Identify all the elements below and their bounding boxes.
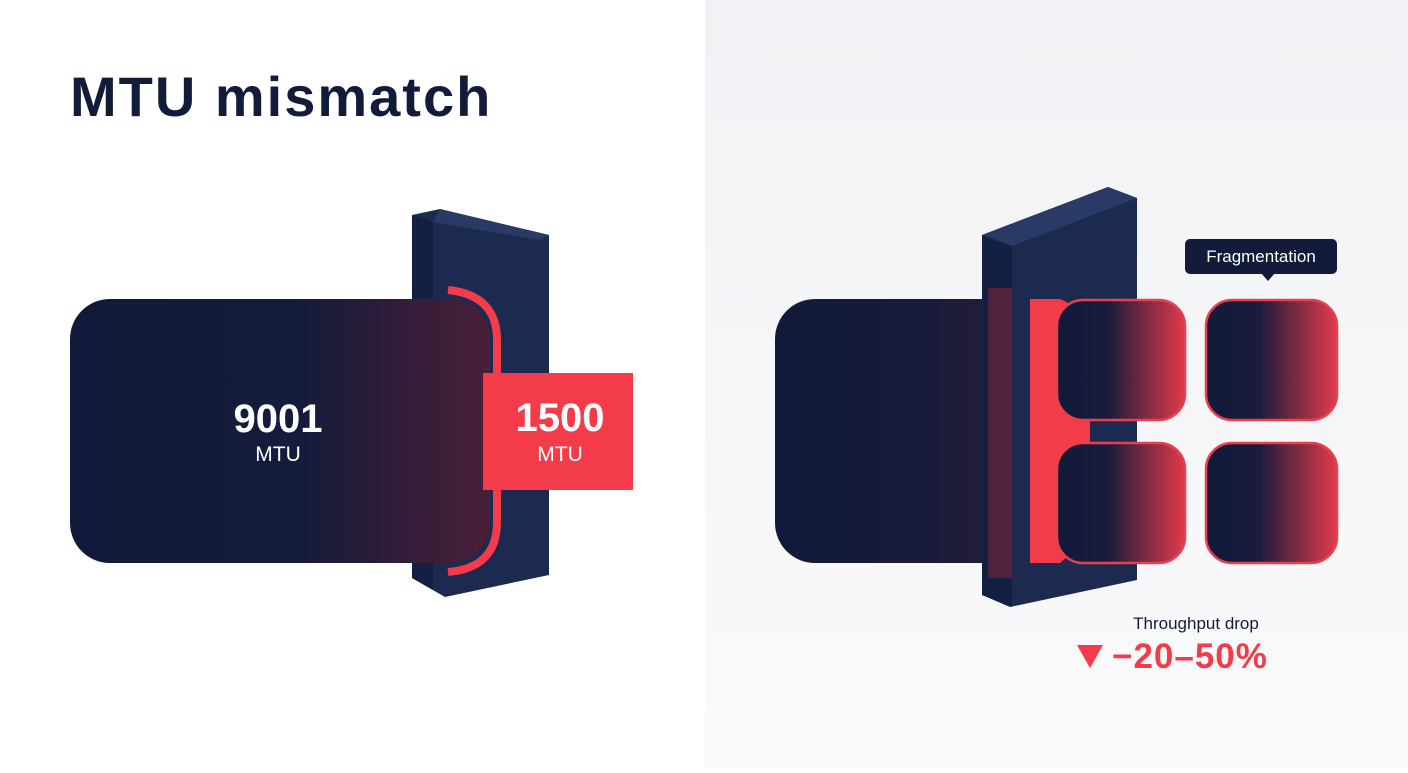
tooltip: Fragmentation: Fragmentation xyxy=(1206,247,1316,266)
red seal right xyxy=(1030,299,1090,563)
packet 9001 xyxy=(70,299,490,563)
left diagram: 9001 packet into 1500 interface xyxy=(70,209,633,597)
red seal arc xyxy=(448,290,497,572)
throughput drop: Throughput drop xyxy=(1133,614,1259,633)
wall left xyxy=(412,209,549,597)
throughput drop xyxy=(1077,614,1268,676)
background right half xyxy=(705,0,1408,768)
title: MTU mismatch xyxy=(70,65,492,128)
1500 MTU label: MTU xyxy=(537,443,583,466)
throughput drop: −20–50% xyxy=(1112,637,1268,676)
tooltip: Fragmentation xyxy=(1185,239,1337,281)
wall right xyxy=(982,187,1137,607)
packet 9001: 9001 xyxy=(234,397,322,441)
packet right xyxy=(775,299,1045,563)
1500 MTU label: 1500 xyxy=(516,396,604,440)
fragments xyxy=(1057,300,1337,563)
1500 MTU label xyxy=(483,373,633,490)
right diagram: fragmentation xyxy=(775,187,1337,676)
packet 9001: MTU xyxy=(255,443,301,466)
